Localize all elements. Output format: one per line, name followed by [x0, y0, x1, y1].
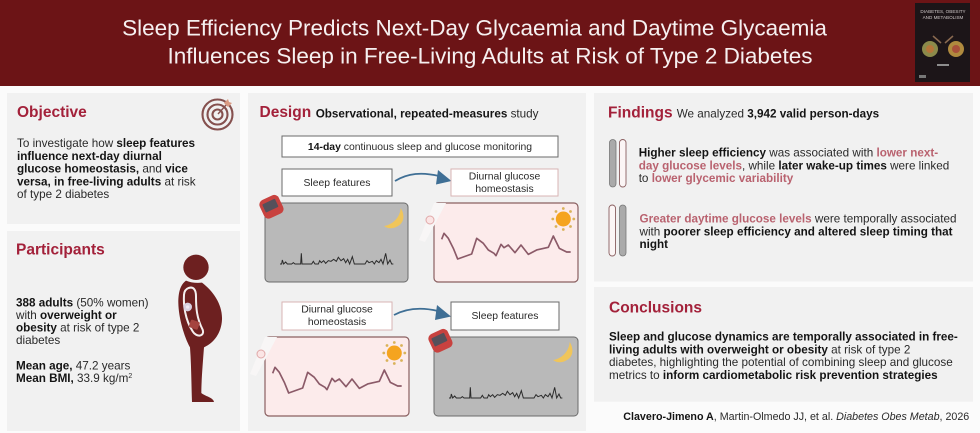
box: diurnal glucose top: Diurnal glucose	[469, 172, 541, 182]
conclusions text: Sleep and glucose dynamics are temporally associated in free-	[609, 331, 958, 344]
objective text: influence next-day diurnal	[17, 150, 162, 163]
citation: Clavero-Jimeno A, Martin-Olmedo JJ, et al. Diabetes Obes Metab, 2026	[623, 411, 969, 423]
box: diurnal glucose top	[451, 169, 558, 196]
icon: sun	[551, 207, 575, 231]
participants text: 2	[128, 373, 132, 380]
chart: sleep bottom	[427, 327, 578, 416]
header banner	[0, 0, 980, 86]
finding two text: Greater daytime glucose levels were temporally associated	[640, 212, 957, 225]
heading: participants: Participants	[16, 242, 105, 258]
finding two text: with poorer sleep efficiency and altered sleep timing that	[638, 225, 953, 238]
box: diurnal glucose bottom: homeostasis	[308, 317, 366, 328]
participants text: 388 adults (50% women)	[16, 296, 149, 309]
icon: sun	[382, 341, 406, 365]
panel: findings	[594, 93, 973, 282]
title: Sleep Efficiency Predicts Next-Day Glycaemia and Daytime Glycaemia	[122, 16, 827, 40]
icon: moon	[384, 208, 403, 228]
heading: findings: Findings	[608, 104, 673, 121]
box: monitoring: 14-day continuous sleep and glucose monitoring	[308, 142, 532, 153]
finding one text: day glucose levels, while later wake-up times were linked	[639, 159, 949, 172]
objective text	[17, 137, 196, 201]
icon: glucose then sleep bars	[609, 205, 626, 256]
icon: sleep then glucose bars	[610, 140, 626, 187]
journal cover: AND METABOLISM	[923, 15, 964, 20]
participants text: Mean BMI, 33.9 kg/m	[16, 372, 128, 385]
box: sleep features top	[282, 169, 392, 196]
box: monitoring	[282, 136, 558, 157]
title	[122, 16, 827, 68]
icon: person with sensors	[178, 255, 222, 402]
box: sleep features top: Sleep features	[303, 178, 371, 189]
panel: objective	[7, 93, 240, 224]
finding two text	[638, 212, 957, 251]
icon: target	[202, 99, 232, 130]
icon: sleep tracker	[427, 327, 454, 354]
heading: conclusions: Conclusions	[609, 299, 702, 316]
participants text	[15, 296, 149, 385]
finding two text: night	[640, 238, 668, 251]
objective text: of type 2 diabetes	[17, 188, 109, 201]
arrow: glucose to sleep	[394, 305, 451, 320]
objective text: To investigate how sleep features	[17, 137, 196, 150]
participants text: Mean age, 47.2 years	[16, 360, 130, 373]
box: sleep features bottom: Sleep features	[471, 311, 539, 322]
icon: arm with glucose sensor	[250, 337, 277, 376]
findings subtitle: We analyzed 3,942 valid person-days	[677, 108, 880, 120]
participants text: with overweight or	[15, 309, 117, 322]
icon: arm with glucose sensor	[419, 203, 446, 242]
title: Influences Sleep in Free-Living Adults at Risk of Type 2 Diabetes	[168, 44, 812, 68]
box: diurnal glucose top: homeostasis	[475, 184, 534, 195]
box: sleep features bottom	[451, 302, 559, 330]
journal cover: DIABETES, OBESITY	[920, 9, 966, 14]
heading: objective: Objective	[17, 104, 87, 121]
box: diurnal glucose bottom	[282, 302, 392, 330]
conclusions text: diabetes, highlighting the potential of combining sleep and glucose	[609, 356, 953, 369]
finding one text: to lower glycemic variability	[639, 172, 794, 185]
objective text: versa, in free-living adults at risk	[17, 175, 196, 188]
arrow: sleep to glucose	[395, 170, 452, 184]
chart: glucose top	[419, 203, 578, 282]
conclusions text: metrics to inform cardiometabolic risk prevention strategies	[609, 369, 938, 382]
panel: conclusions	[594, 287, 973, 402]
participants text: diabetes	[16, 334, 60, 347]
icon: moon	[553, 342, 572, 362]
conclusions text: living adults with overweight or obesity at risk of type 2	[609, 343, 910, 356]
heading: design: Design	[260, 104, 311, 121]
conclusions text	[609, 331, 958, 382]
panel: participants	[7, 231, 240, 431]
finding one text	[639, 147, 949, 185]
icon: sleep tracker	[258, 193, 285, 220]
chart: sleep top	[258, 193, 408, 282]
chart: glucose bottom	[250, 337, 409, 416]
finding one text: Higher sleep efficiency was associated with lower next-	[639, 147, 938, 160]
objective text: glucose homeostasis, and vice	[17, 162, 188, 176]
journal cover	[915, 3, 970, 82]
participants text: obesity at risk of type 2	[16, 322, 139, 334]
box: diurnal glucose bottom: Diurnal glucose	[301, 304, 373, 316]
design subtitle: Observational, repeated-measures study	[316, 108, 539, 120]
panel: design	[248, 93, 586, 431]
